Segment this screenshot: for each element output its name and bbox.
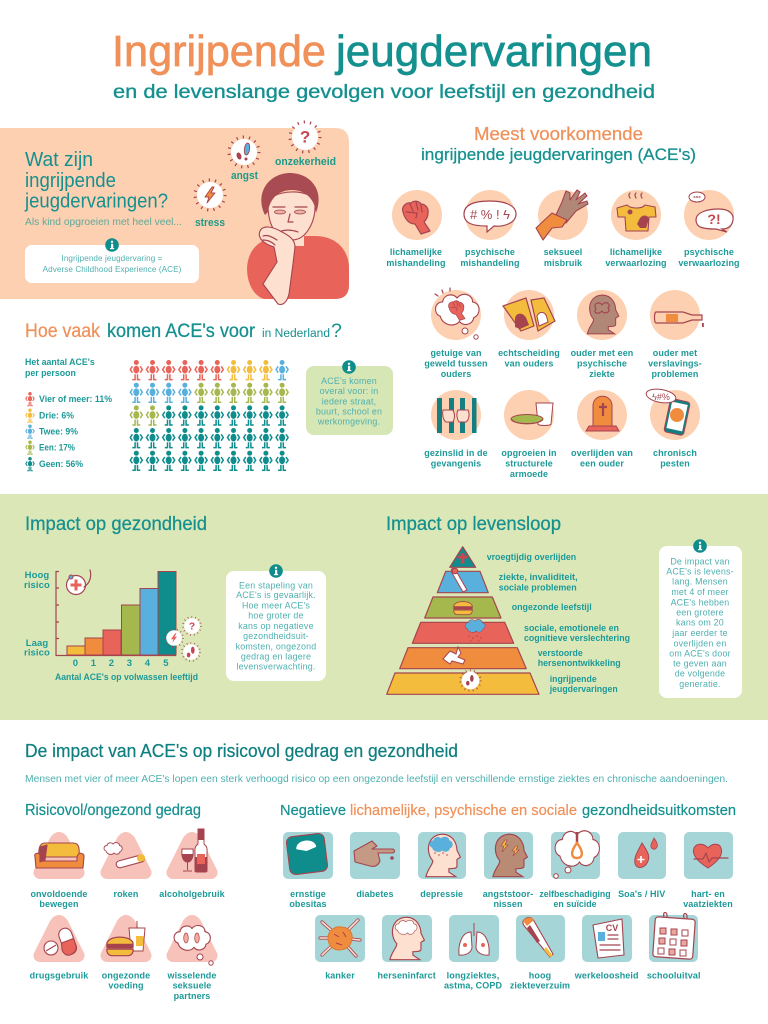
callout: definition: Ingrijpende jeugdervaring =: [61, 254, 163, 263]
callout: impact is levenslang: jaar eerder te: [671, 628, 728, 638]
item: overlijden van een ouder: een ouder: [580, 458, 624, 468]
pyramid layer: hersenontwikkeling: [400, 648, 526, 669]
item: getuige van geweld: getuige van: [430, 348, 482, 358]
item: opgroeien in armoede: [501, 390, 557, 479]
item: onvoldoende bewegen: bewegen: [39, 899, 79, 909]
icon: prison bars: [437, 398, 476, 433]
label: angst: angst: [231, 170, 258, 182]
legend: aantal ACE's per persoon: Geen: 56%: [39, 459, 83, 469]
pictogram chart: 50 persons: [130, 360, 288, 470]
pyramid labels: cognitieve verslechtering: [524, 633, 630, 643]
item: hoog ziekteverzuim: hoog: [529, 970, 551, 980]
icon: wine bottle and glass: [182, 829, 207, 872]
callout: ACE's overal: overal voor: in: [320, 386, 378, 396]
title: [112, 27, 652, 76]
icon: stethoscope: [66, 570, 91, 594]
heading: hoe vaak: ?: [331, 320, 342, 342]
callout: ACE's overal: [306, 360, 393, 435]
icon: onzekerheid burst: [290, 122, 320, 152]
icon: pills: [44, 926, 78, 956]
item: getuige van geweld: geweld tussen: [424, 358, 488, 368]
pyramid labels: sociale problemen: [499, 582, 577, 592]
heading: de impact van ACE's: De impact van ACE's op risicovol gedrag en gezondheid: [25, 741, 458, 761]
item: depressie: [418, 832, 466, 899]
item: opgroeien in armoede: armoede: [510, 469, 548, 479]
panel: impact band: [0, 494, 768, 720]
icon: calendar: [653, 912, 695, 959]
icon: phone and bubble: ϟ#%: [652, 392, 670, 402]
callout: impact is levenslang: een grotere: [676, 608, 724, 618]
item: lichamelijke mishandeling: mishandeling: [386, 258, 446, 268]
item: schooluitval: schooluitval: [647, 970, 701, 980]
item: longziektes: longziektes,: [447, 970, 499, 980]
callout: ACE's overal: buurt, school en: [316, 406, 382, 416]
pyramid icons: [443, 553, 485, 691]
item: opgroeien in armoede: opgroeien in: [501, 448, 557, 458]
pyramid labels: jeugdervaringen: [549, 684, 618, 694]
item: lichamelijke verwaarlozing: verwaarlozing: [605, 258, 667, 268]
item: ouder met verslavingsproblemen: ouder met: [653, 348, 697, 358]
item: ongezonde voeding: [100, 915, 152, 990]
item: hart- en vaatziekten: vaatziekten: [683, 899, 733, 909]
callout: stapeling: Hoe meer ACE's: [242, 600, 310, 610]
pyramid labels: [487, 552, 630, 694]
heading: meest voorkomende: [421, 124, 696, 164]
icon: bottle: [654, 312, 704, 327]
item: onvoldoende bewegen: onvoldoende: [30, 889, 88, 899]
item: lichamelijke mishandeling: lichamelijke: [390, 247, 442, 257]
bar chart: risico per aantal ACE's: 0: [73, 658, 78, 669]
icon: angst burst: [229, 137, 259, 167]
item: gezinslid in de gevangenis: gezinslid in de: [424, 448, 488, 458]
callout: stapeling: levensverwachting.: [236, 662, 316, 672]
icon: cloud with noose: [554, 831, 599, 878]
heading: wat zijn: ingrijpende: [25, 170, 116, 192]
item: longziektes: astma, COPD: [444, 980, 502, 990]
heading: hoe vaak: [25, 320, 342, 342]
item: ernstige obesitas: obesitas: [289, 899, 327, 909]
item: seksueel misbruik: seksueel: [544, 247, 582, 257]
callout: impact is levenslang: [659, 539, 742, 698]
legend: aantal ACE's per persoon: [25, 357, 112, 471]
item: wisselende seksuele partners: partners: [174, 991, 210, 1001]
item: psychische verwaarlozing: psychische: [684, 247, 734, 257]
item: herseninfarct: herseninfarct: [378, 970, 436, 980]
text: als kind: Als kind opgroeien met heel veel...: [25, 216, 182, 228]
item: ouder met psychische ziekte: ouder met een: [571, 348, 633, 358]
item: chronisch pesten: chronisch: [653, 448, 697, 458]
item: hart- en vaatziekten: [683, 832, 733, 909]
pyramid labels: vroegtijdig overlijden: [487, 552, 577, 562]
heading: wat zijn: jeugdervaringen?: [24, 190, 168, 212]
item: Soa's / HIV: [618, 832, 666, 899]
bar chart: risico per aantal ACE's: Aantal ACE's op volwassen leeftijd: [55, 672, 198, 682]
icon: onzekerheid burst: ?: [300, 128, 310, 146]
legend: aantal ACE's per persoon: Twee: 9%: [39, 426, 78, 436]
item: overlijden van een ouder: [571, 390, 633, 468]
item: echtscheiding: echtscheiding: [498, 348, 560, 358]
item: longziektes: [444, 915, 502, 990]
intro text: Mensen met vier of meer ACE's lopen een sterk verhoogd risico op een ongezonde leefstijl en verschillende ernstige ziektes en chronische aandoeningen.: [25, 773, 728, 785]
item: hoog ziekteverzuim: [510, 915, 570, 990]
callout: stapeling: kans op negatieve: [238, 621, 314, 631]
item: angststoornissen: nissen: [493, 899, 523, 909]
title: jeugdervaringen: [334, 27, 652, 76]
item: zelfbeschadiging en suïcide: zelfbeschadiging: [539, 889, 611, 899]
item: psychische verwaarlozing: [678, 190, 740, 268]
heading: hoe vaak: Hoe vaak: [25, 321, 100, 342]
item: echtscheiding: [498, 290, 560, 368]
pyramid labels: sociale, emotionele en: [524, 623, 619, 633]
callout: impact is levenslang: om ACE's door: [669, 648, 731, 658]
item: lichamelijke mishandeling: [386, 190, 446, 268]
icon: lungs: [459, 923, 489, 955]
item: zelfbeschadiging en suïcide: en suïcide: [553, 899, 597, 909]
item: lichamelijke verwaarlozing: lichamelijke: [610, 247, 662, 257]
heading: negatieve uitkomsten: gezondheidsuitkomsten: [582, 802, 736, 819]
item: ouder met verslavingsproblemen: verslavings-: [648, 358, 702, 368]
icon: stress bursts: ?: [189, 622, 195, 633]
item: ongezonde voeding: ongezonde: [102, 970, 150, 980]
icon: blood drops: [635, 838, 657, 868]
item: schooluitval: [647, 912, 701, 980]
item: kanker: [315, 915, 365, 980]
icon: couch: [35, 843, 84, 868]
heading: negatieve uitkomsten: lichamelijke, psychische en sociale: [350, 802, 577, 819]
callout: impact is levenslang: te geven aan: [673, 659, 727, 669]
item: ouder met verslavingsproblemen: problemen: [652, 369, 698, 379]
item: ouder met psychische ziekte: psychische: [577, 358, 627, 368]
callout: stapeling: komsten, ongezond: [236, 641, 316, 651]
item: psychische verwaarlozing: verwaarlozing: [678, 258, 740, 268]
callout: impact is levenslang: lang. Mensen: [672, 577, 728, 587]
heading: hoe vaak: komen ACE's voor: [107, 321, 256, 342]
item: wisselende seksuele partners: seksuele: [173, 980, 211, 990]
bar chart: risico per aantal ACE's: 1: [91, 658, 97, 669]
icon: dirty t-shirt: [617, 193, 656, 231]
callout: stapeling: hoe groter de: [248, 611, 304, 621]
callout: impact is levenslang: de volgende: [675, 669, 725, 679]
item: roken: [100, 832, 152, 899]
item: hoog ziekteverzuim: ziekteverzuim: [510, 980, 570, 990]
item: onvoldoende bewegen: [30, 832, 88, 909]
icon: head with brain: [390, 917, 424, 960]
item: chronisch pesten: [645, 387, 700, 468]
legend: aantal ACE's per persoon: Een: 17%: [39, 442, 75, 452]
title: Ingrijpende: [112, 27, 326, 76]
item: Soa's / HIV: Soa's / HIV: [618, 889, 665, 899]
item: alcoholgebruik: [159, 829, 226, 899]
callout: definition: [25, 238, 199, 283]
legend: aantal ACE's per persoon: Vier of meer: 11%: [39, 394, 112, 404]
bar chart: risico per aantal ACE's: 3: [127, 658, 132, 669]
icon: head with tangled mind: [587, 295, 619, 334]
icon: thought cloud with fist: [435, 288, 479, 339]
callout: stapeling: [226, 564, 326, 681]
item: werkeloosheid: werkeloosheid: [574, 970, 639, 980]
pyramid labels: hersenontwikkeling: [538, 658, 621, 668]
icon: burger and drink: [106, 921, 145, 956]
callout: impact is levenslang: met 4 of meer: [671, 587, 729, 597]
pyramid layer: ziekte: [437, 571, 488, 593]
callout: impact is levenslang: kans om 20: [676, 618, 724, 628]
heading: risicovol gedrag: Risicovol/ongezond gedrag: [25, 802, 201, 819]
item: zelfbeschadiging en suïcide: [539, 831, 611, 909]
item: wisselende seksuele partners: wisselende: [166, 970, 217, 980]
icon: fist: [403, 201, 430, 234]
heading: impact op gezondheid: Impact op gezondheid: [25, 514, 207, 535]
pyramid labels: ingrijpende: [550, 674, 597, 684]
legend: aantal ACE's per persoon: Drie: 6%: [39, 410, 74, 420]
pyramid layer: cognitieve verslechtering: [412, 622, 514, 643]
icon: CV sheet: CV: [606, 923, 618, 933]
item: drugsgebruik: [30, 915, 89, 980]
icon: stress bursts: [165, 617, 201, 661]
bar chart: risico per aantal ACE's: Laag: [26, 638, 48, 649]
heading: negatieve uitkomsten: [280, 802, 736, 819]
item: overlijden van een ouder: overlijden van: [571, 448, 633, 458]
item: ouder met verslavingsproblemen: [648, 290, 704, 379]
item: depressie: depressie: [420, 889, 463, 899]
label: onzekerheid: onzekerheid: [275, 156, 336, 168]
callout: ACE's overal: iedere straat,: [322, 396, 376, 406]
bar chart: risico per aantal ACE's: 2: [109, 658, 114, 669]
icon: cigarette and smoke: [104, 843, 146, 869]
item: angststoornissen: angststoor-: [483, 889, 533, 899]
pyramid: impact op levensloop: [387, 547, 539, 694]
bar chart: risico per aantal ACE's: risico: [24, 648, 50, 658]
icon: finger with blood drop: [354, 841, 395, 866]
callout: impact is levenslang: overlijden en: [674, 638, 726, 648]
callout: impact is levenslang: ACE's hebben: [671, 597, 729, 607]
icon: hands: [536, 190, 588, 240]
item: echtscheiding: van ouders: [504, 358, 554, 368]
icon: heart with pulse: [693, 844, 728, 868]
item: seksueel misbruik: [536, 190, 588, 268]
pyramid labels: ziekte, invaliditeit,: [499, 572, 578, 582]
callout: stapeling: gezondheidsuit-: [243, 631, 309, 641]
heading: hoe vaak: in Nederland: [262, 328, 330, 340]
item: ouder met psychische ziekte: ziekte: [589, 369, 615, 379]
callout: impact is levenslang: De impact van: [670, 556, 730, 566]
pyramid layer: ingrijpende jeugdervaringen: [387, 673, 539, 694]
subtitle: en de levenslange gevolgen voor leefstijl en gezondheid: [113, 81, 655, 103]
item: wisselende seksuele partners: [166, 915, 218, 1001]
item: chronisch pesten: pesten: [660, 458, 690, 468]
callout: definition: Adverse Childhood Experience (ACE): [43, 265, 182, 274]
heading: impact op levensloop: Impact op levensloop: [386, 514, 561, 535]
pyramid layer: ongezonde leefstijl: [425, 597, 501, 618]
icon: scale: [286, 833, 328, 875]
heading: wat zijn: Wat zijn: [25, 149, 93, 171]
item: seksueel misbruik: misbruik: [544, 258, 583, 268]
icon: head with lightning: [493, 834, 527, 877]
callout: stapeling: Een stapeling van: [239, 580, 313, 590]
legend: aantal ACE's per persoon: Het aantal ACE's: [25, 357, 95, 367]
bar chart: risico per aantal ACE's: 5: [163, 658, 169, 669]
callout: stapeling: ACE's is gevaarlijk.: [236, 590, 316, 600]
icon: torn photo: [503, 298, 555, 331]
bar chart: risico per aantal ACE's: 4: [145, 658, 151, 669]
item: opgroeien in armoede: structurele: [505, 458, 553, 468]
callout: impact is levenslang: generatie.: [679, 679, 721, 689]
item: werkeloosheid: [574, 915, 639, 980]
item: alcoholgebruik: alcoholgebruik: [159, 889, 226, 899]
item: herseninfarct: [378, 915, 436, 980]
item: kanker: kanker: [325, 970, 355, 980]
icon: stress burst: [195, 180, 225, 210]
pyramid labels: ongezonde leefstijl: [512, 602, 592, 612]
item: getuige van geweld: ouders: [441, 369, 471, 379]
item: hart- en vaatziekten: hart- en: [691, 889, 725, 899]
icon: thought cloud with footprints: [174, 926, 213, 965]
item: ongezonde voeding: voeding: [108, 980, 144, 990]
label: stress: stress: [195, 217, 225, 229]
pyramid layer: vroegtijdig overlijden: [450, 547, 476, 567]
bar chart: risico per aantal ACE's: Hoog: [25, 570, 49, 581]
icon: thermometer: [523, 917, 553, 957]
item: gezinslid in de gevangenis: gevangenis: [431, 458, 481, 468]
item: ouder met psychische ziekte: [571, 290, 633, 379]
icon: speech bubble: # % ! ϟ: [470, 207, 510, 222]
panel: wat zijn ingrijpende jeugdervaringen: [0, 122, 349, 305]
bar chart: risico per aantal ACE's: [24, 570, 198, 682]
icon: cancer cell: [320, 920, 360, 956]
item: drugsgebruik: drugsgebruik: [30, 970, 89, 980]
item: angststoornissen: [483, 832, 533, 909]
legend: aantal ACE's per persoon: per persoon: [25, 368, 76, 378]
icon: head with rain cloud: [426, 834, 460, 877]
item: diabetes: diabetes: [356, 889, 394, 899]
pyramid labels: verstoorde: [538, 648, 583, 658]
heading: meest voorkomende: Meest voorkomende: [474, 124, 643, 144]
heading: negatieve uitkomsten: Negatieve: [280, 802, 346, 819]
icon: speech bubbles: ?!: [707, 211, 721, 227]
item: psychische mishandeling: psychische: [465, 247, 515, 257]
icon: plate and glass: [511, 403, 553, 426]
illustration: thinking young person: [247, 173, 349, 305]
bar chart: risico per aantal ACE's: risico: [24, 580, 50, 591]
item: gezinslid in de gevangenis: [424, 390, 488, 468]
callout: ACE's overal: werkomgeving.: [317, 416, 380, 426]
item: ernstige obesitas: ernstige: [290, 889, 326, 899]
item: lichamelijke verwaarlozing: [605, 190, 667, 268]
item: diabetes: [350, 832, 400, 899]
item: ernstige obesitas: [283, 832, 333, 909]
item: psychische mishandeling: [460, 190, 520, 268]
callout: stapeling: gedrag en lagere: [241, 652, 311, 662]
item: roken: roken: [113, 889, 139, 899]
item: psychische mishandeling: mishandeling: [460, 258, 520, 268]
heading: meest voorkomende: ingrijpende jeugdervaringen (ACE's): [421, 145, 696, 164]
item: getuige van geweld: [424, 288, 488, 379]
icon: gravestone: [586, 396, 619, 431]
callout: ACE's overal: ACE's komen: [321, 376, 377, 386]
callout: impact is levenslang: ACE's is levens-: [666, 567, 734, 577]
